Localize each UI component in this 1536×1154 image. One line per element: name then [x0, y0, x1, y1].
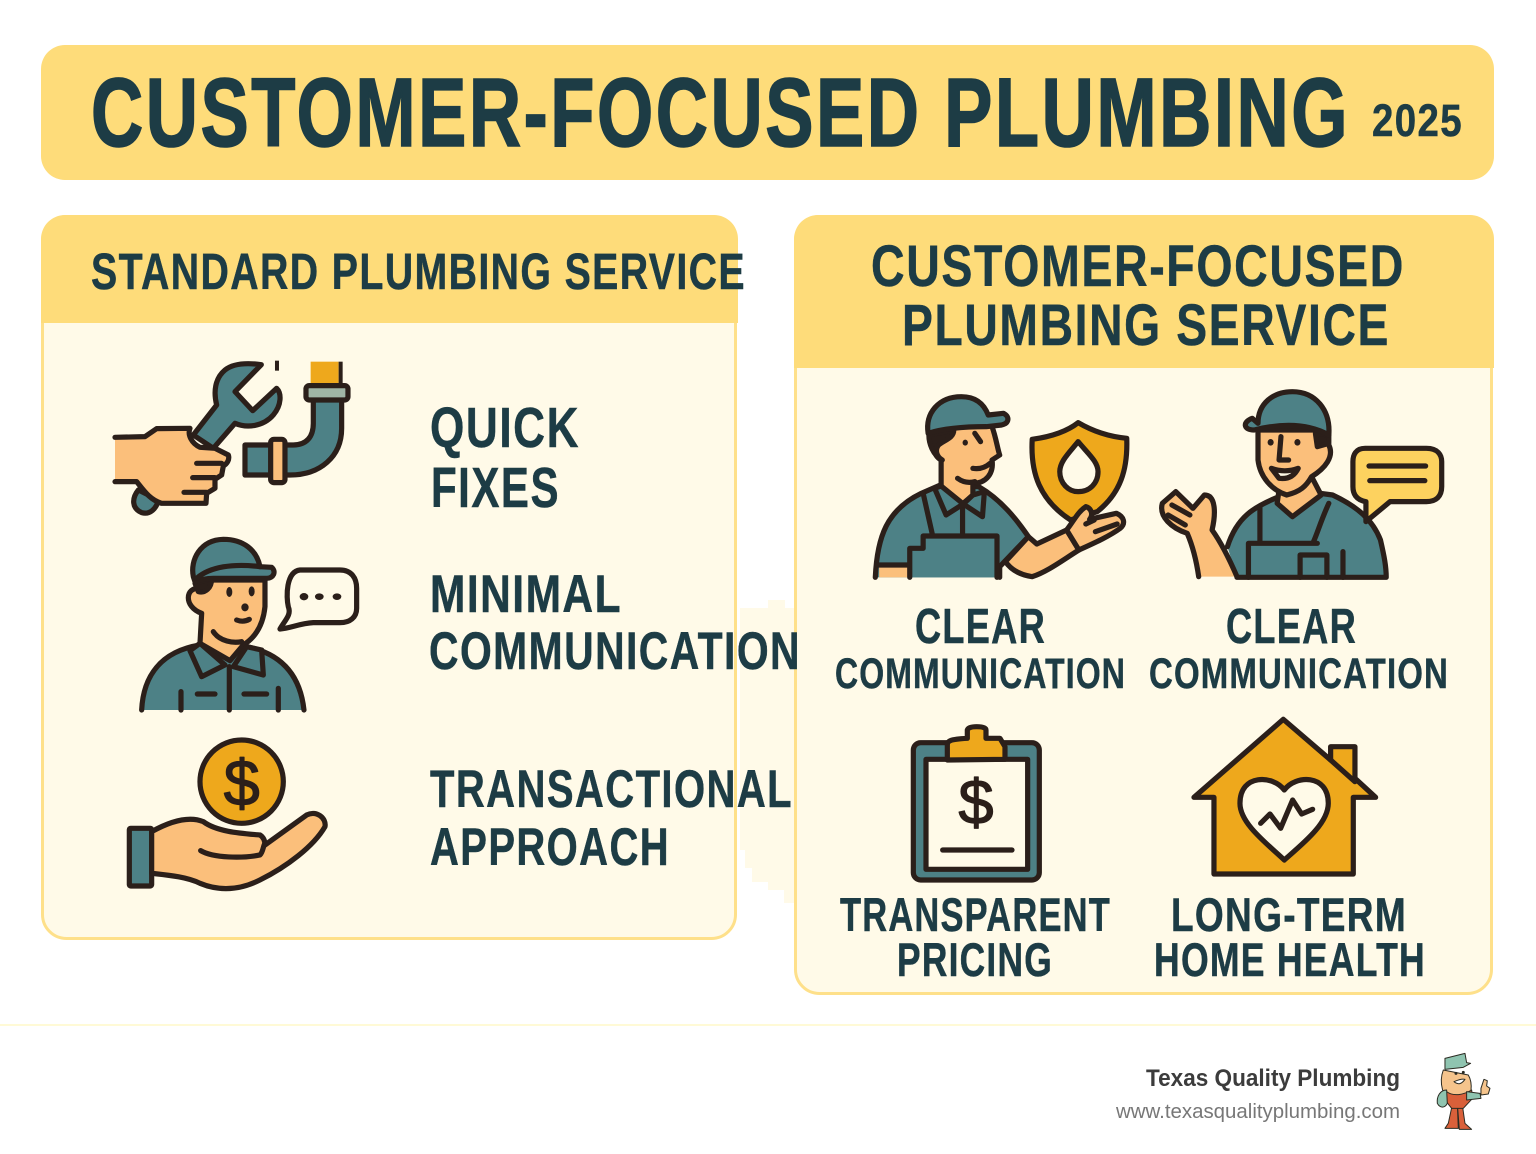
text: transparent pricing: TRANSPARENT: [840, 888, 1111, 941]
text: transactional approach: [430, 760, 793, 877]
icon: clipboard with price: $: [958, 768, 994, 838]
icon: coin over open hand: $: [224, 746, 260, 819]
text: long-term home health: [1154, 888, 1426, 986]
icon: house with heart and pulse: [1194, 719, 1376, 874]
text: long-term home health: HOME HEALTH: [1154, 933, 1426, 986]
heading: standard service: STANDARD PLUMBING SERVICE: [91, 243, 746, 300]
text: clear communication (right): COMMUNICATION: [1149, 650, 1449, 698]
text: clear communication (right): CLEAR: [1226, 600, 1357, 654]
text: quick fixes: QUICK: [430, 396, 580, 460]
panel: standard plumbing service: [41, 215, 746, 938]
icon: hand with wrench and pipe: [115, 361, 348, 513]
icon: friendly plumber with speech bubble: [1162, 392, 1442, 577]
text: quick fixes: [430, 396, 580, 520]
text: minimal communication: MINIMAL: [430, 565, 622, 624]
title banner: [41, 45, 1494, 180]
text: clear communication (right): [1149, 600, 1449, 698]
text: clear communication (left): [835, 600, 1126, 698]
panel connector background: [740, 600, 795, 903]
heading: customer-focused service: PLUMBING SERVICE: [902, 293, 1390, 358]
heading: customer-focused service: [871, 234, 1405, 358]
icon: clipboard with price: [913, 727, 1039, 880]
text: quick fixes: FIXES: [431, 456, 560, 520]
icon: coin over open hand: [129, 740, 325, 889]
footer brand text: www.texasqualityplumbing.com: [1115, 1101, 1400, 1123]
text: transparent pricing: PRICING: [897, 933, 1053, 986]
text: transactional approach: APPROACH: [430, 818, 670, 877]
text: transactional approach: TRANSACTIONAL: [430, 760, 793, 819]
panel: customer-focused plumbing service: [794, 215, 1494, 994]
heading: customer-focused service: CUSTOMER-FOCUSED: [871, 234, 1405, 299]
icon: plumber with empty speech bubble: [142, 539, 357, 710]
text: clear communication (left): CLEAR: [915, 600, 1046, 654]
text: transparent pricing: [840, 888, 1111, 986]
footer brand text: [1115, 1065, 1400, 1123]
text: clear communication (left): COMMUNICATION: [835, 650, 1126, 698]
text: minimal communication: [429, 565, 801, 681]
year: 2025: [1372, 95, 1463, 146]
text: minimal communication: COMMUNICATION: [429, 622, 801, 681]
icon: plumber holding shield with water drop: [875, 397, 1127, 577]
text: long-term home health: LONG-TERM: [1171, 888, 1407, 941]
footer brand text: Texas Quality Plumbing: [1146, 1065, 1400, 1092]
icon: plumber mascot: [1437, 1053, 1490, 1129]
